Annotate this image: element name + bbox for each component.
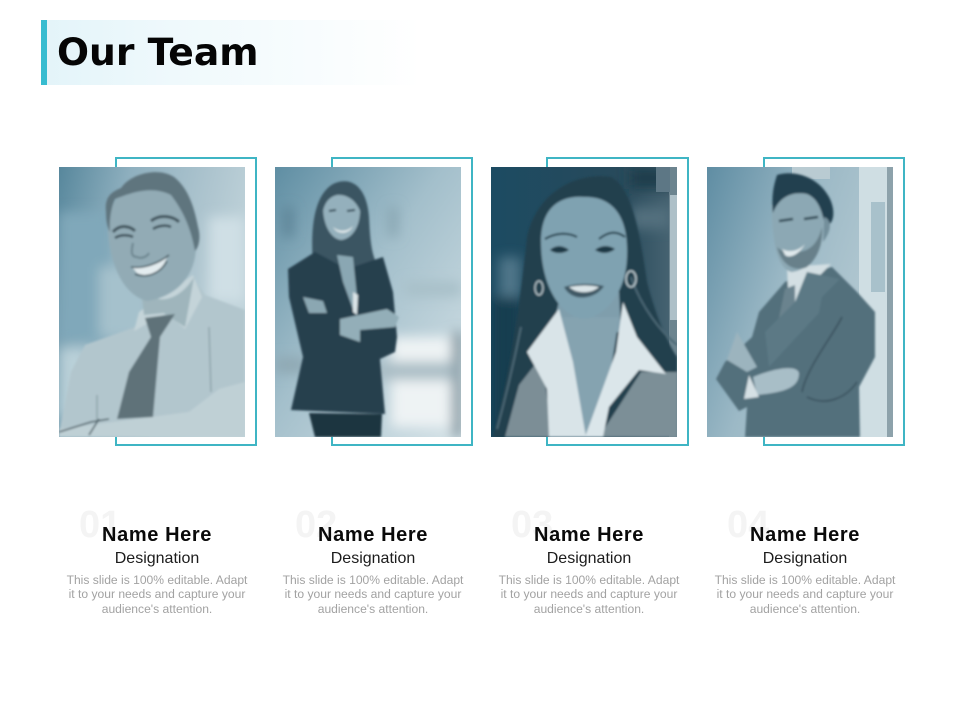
designation: Designation bbox=[115, 550, 199, 567]
description bbox=[498, 573, 680, 616]
team photos with frames bbox=[59, 157, 905, 446]
description: This slide is 100% editable. Adapt bbox=[283, 573, 463, 587]
description: it to your needs and capture your bbox=[285, 587, 461, 601]
description: it to your needs and capture your bbox=[717, 587, 893, 601]
member 3 text block bbox=[498, 504, 680, 616]
member 3 frame bbox=[547, 158, 688, 445]
title banner bbox=[41, 20, 421, 85]
number 03: 03 bbox=[511, 504, 553, 546]
heading: Our Team: Our Team bbox=[57, 30, 259, 74]
designation: Designation bbox=[331, 550, 415, 567]
photo: member 3, close-up of woman with hoop earrings bbox=[491, 167, 677, 437]
photo: member 4, man in suit with crossed arms bbox=[707, 167, 893, 437]
designation: Designation bbox=[763, 550, 847, 567]
name: Name Here bbox=[534, 524, 644, 546]
number 01: 01 bbox=[79, 504, 121, 546]
description bbox=[66, 573, 248, 616]
member 4 frame bbox=[764, 158, 904, 445]
number 02: 02 bbox=[295, 504, 337, 546]
accent bar bbox=[41, 20, 47, 85]
name: Name Here bbox=[102, 524, 212, 546]
member 2 text block bbox=[282, 504, 464, 616]
description bbox=[282, 573, 464, 616]
member 1 text block bbox=[66, 504, 248, 616]
description: it to your needs and capture your bbox=[501, 587, 677, 601]
photo: member 2, woman in dark blazer bbox=[275, 167, 461, 437]
description: This slide is 100% editable. Adapt bbox=[499, 573, 679, 587]
name: Name Here bbox=[750, 524, 860, 546]
description: audience's attention. bbox=[534, 602, 644, 616]
description bbox=[714, 573, 896, 616]
designation: Designation bbox=[547, 550, 631, 567]
description: This slide is 100% editable. Adapt bbox=[715, 573, 895, 587]
description: audience's attention. bbox=[102, 602, 212, 616]
description: audience's attention. bbox=[750, 602, 860, 616]
photo: member 1, smiling man in shirt and tie bbox=[59, 167, 245, 437]
description: it to your needs and capture your bbox=[69, 587, 245, 601]
member 1 frame bbox=[116, 158, 256, 445]
number 04: 04 bbox=[727, 504, 769, 546]
description: This slide is 100% editable. Adapt bbox=[67, 573, 247, 587]
name: Name Here bbox=[318, 524, 428, 546]
member 2 frame bbox=[332, 158, 472, 445]
member 4 text block bbox=[714, 504, 896, 616]
description: audience's attention. bbox=[318, 602, 428, 616]
